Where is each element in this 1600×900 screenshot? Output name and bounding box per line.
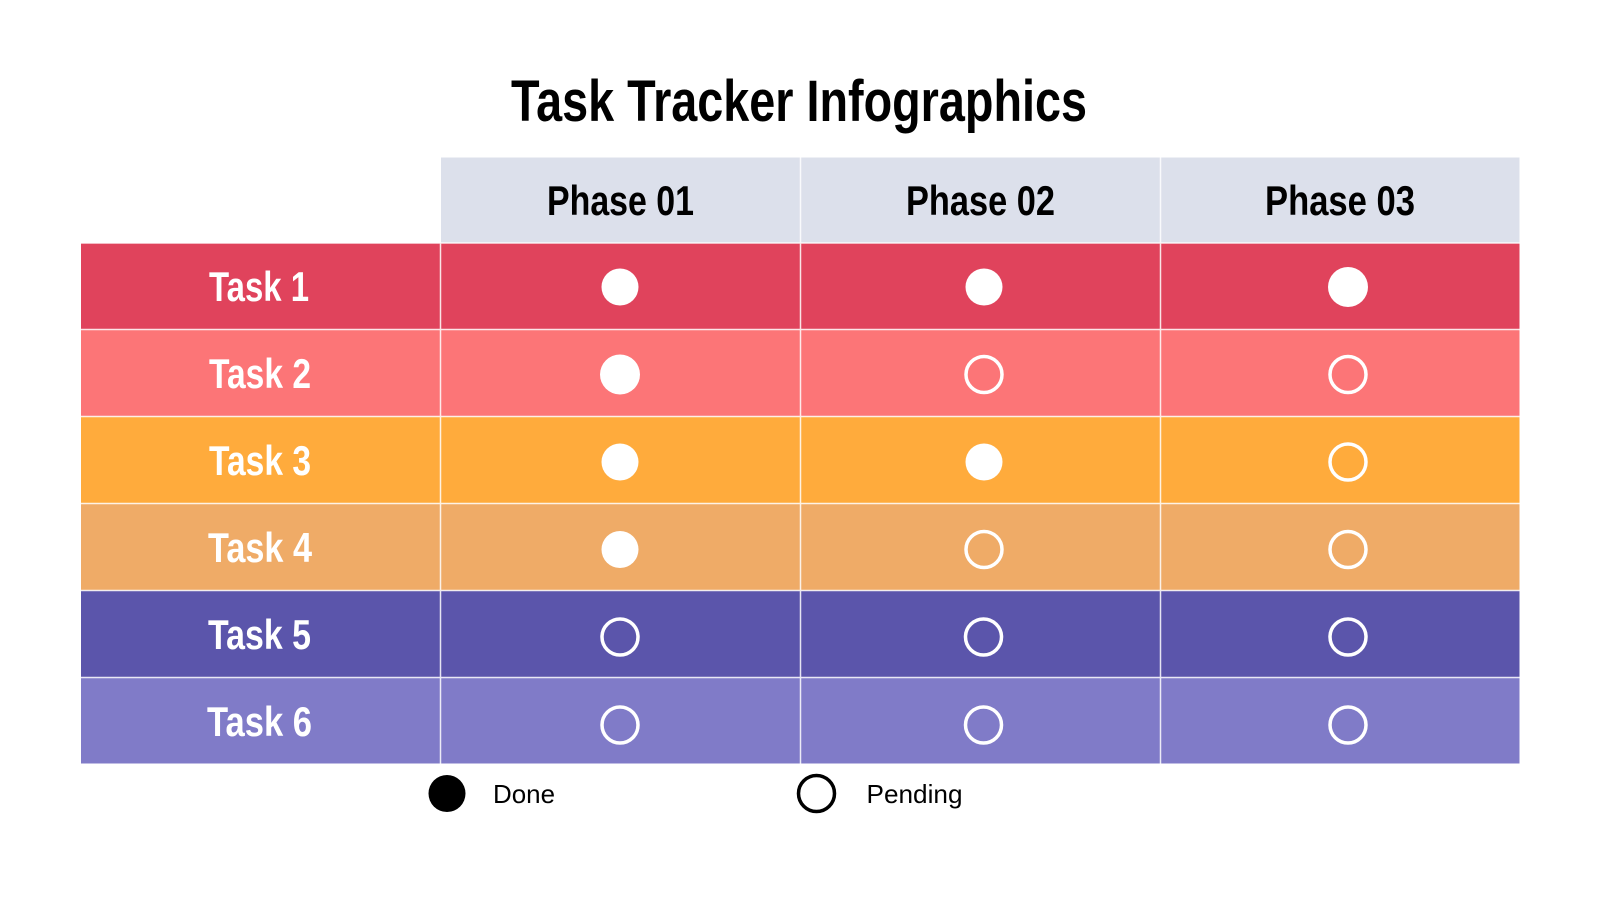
row: Task 2 [81,330,1520,416]
legend: pending [798,776,962,812]
legend: done: Done [493,779,555,809]
row: Task 4 [81,504,1520,590]
legend: pending: Pending [866,779,962,809]
row: Task 1: Task 1 [209,263,309,310]
table [81,158,1520,764]
header row: phases: Phase 01 [547,177,694,224]
legend: done [428,775,555,812]
header row: phases [441,158,1520,243]
header row: phases: Phase 02 [906,177,1055,224]
row: Task 1 [81,243,1520,330]
row: Task 2: Task 2 [209,350,311,397]
row: Task 3 [81,416,1520,504]
row: Task 4: Task 4 [208,524,313,571]
row: Task 5: Task 5 [208,611,311,658]
row: Task 3: Task 3 [209,437,311,484]
title: Task Tracker Infographics [511,69,1087,134]
row: Task 6: Task 6 [207,698,312,745]
header row: phases: Phase 03 [1265,177,1415,224]
row: Task 6 [81,678,1520,764]
row: Task 5 [81,590,1520,678]
